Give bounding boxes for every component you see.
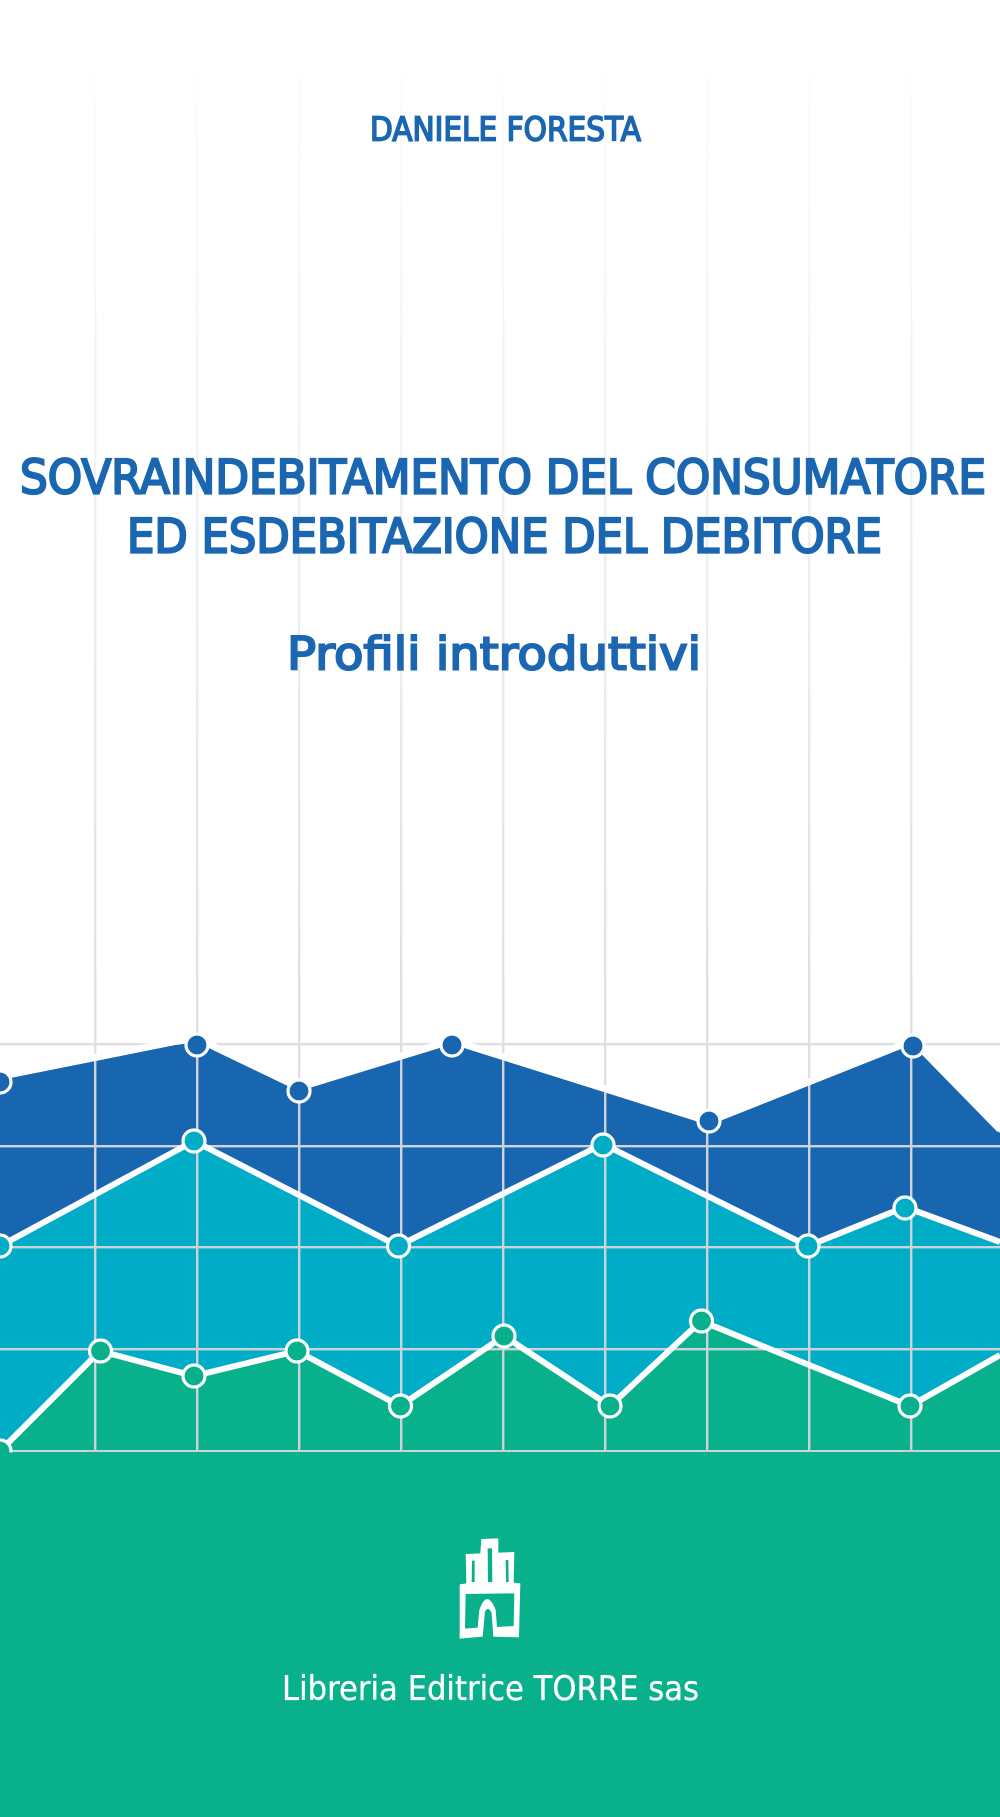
green footer band [0, 1452, 1000, 1817]
background grid on white [0, 20, 1000, 1147]
teal line [0, 1141, 1000, 1246]
green line [0, 1321, 1000, 1451]
green markers [0, 1310, 921, 1462]
author name: DANIELE FORESTA [370, 110, 641, 148]
publisher name: Libreria Editrice TORRE sas [282, 1669, 699, 1708]
dark blue area [0, 1042, 1000, 1460]
grid over areas [0, 1030, 1000, 1452]
dark blue markers [0, 1034, 924, 1132]
title [20, 450, 986, 564]
icon: publisher tower logo [460, 1538, 520, 1639]
green area [0, 1321, 1000, 1460]
dark blue line halo [0, 1038, 1000, 1130]
title: ED ESDEBITAZIONE DEL DEBITORE [127, 510, 882, 564]
area chart [0, 1030, 1000, 1462]
subtitle: Profili introduttivi [287, 628, 701, 680]
teal area [0, 1141, 1000, 1460]
teal markers [0, 1130, 916, 1257]
